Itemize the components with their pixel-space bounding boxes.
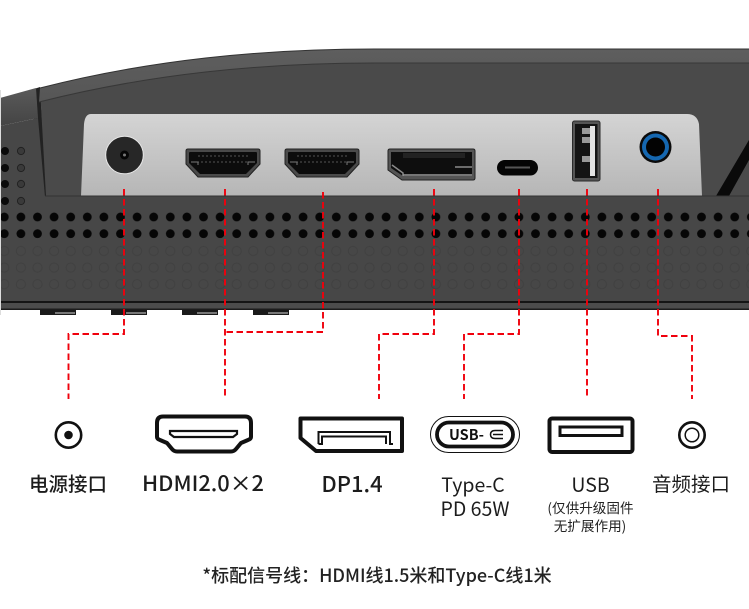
port: HDMI 1 (186, 149, 260, 177)
label: USB: (仅供升级固件 (547, 497, 634, 517)
port: power (106, 136, 143, 174)
footnote: *标配信号线：HDMI线1.5米和Type-C线1米 (202, 562, 552, 588)
label: audio: 音频接口 (652, 468, 730, 497)
port panel (81, 114, 702, 196)
port: HDMI 2 (285, 149, 359, 177)
port: Type-C (497, 160, 538, 176)
label: HDMI: HDMI2.0×2 (142, 468, 264, 498)
port: DisplayPort (388, 149, 475, 180)
label: USB: 无扩展作用) (554, 515, 626, 535)
base edge (0, 301, 749, 310)
port: USB (572, 121, 600, 181)
monitor body (0, 49, 749, 315)
front vent strip (0, 196, 749, 302)
monitor back shell (40, 49, 749, 196)
icon: DisplayPort (300, 418, 402, 451)
label: power: 电源接口 (29, 468, 107, 497)
icon: USB (550, 418, 632, 452)
port: audio (640, 131, 672, 163)
label: USB: USB (571, 469, 610, 498)
label: Type-C (441, 469, 509, 522)
icon: USB-C (430, 416, 520, 452)
seam behind shell (34, 87, 47, 196)
label: DP: DP1.4 (321, 467, 383, 499)
icon: audio (679, 422, 705, 448)
icon: power (56, 422, 81, 448)
icon: USB-C: USB- (449, 424, 484, 445)
dashed leader lines (68, 189, 692, 399)
label: USB (547, 469, 634, 535)
label: Type-C: Type-C (441, 469, 505, 498)
stand feet (40, 310, 289, 315)
left side vents (1, 147, 25, 205)
right slash detail (716, 140, 749, 196)
icon: HDMI (157, 416, 251, 452)
label: Type-C: PD 65W (441, 493, 509, 522)
white left margin (0, 90, 1, 315)
left side piece (0, 88, 38, 126)
